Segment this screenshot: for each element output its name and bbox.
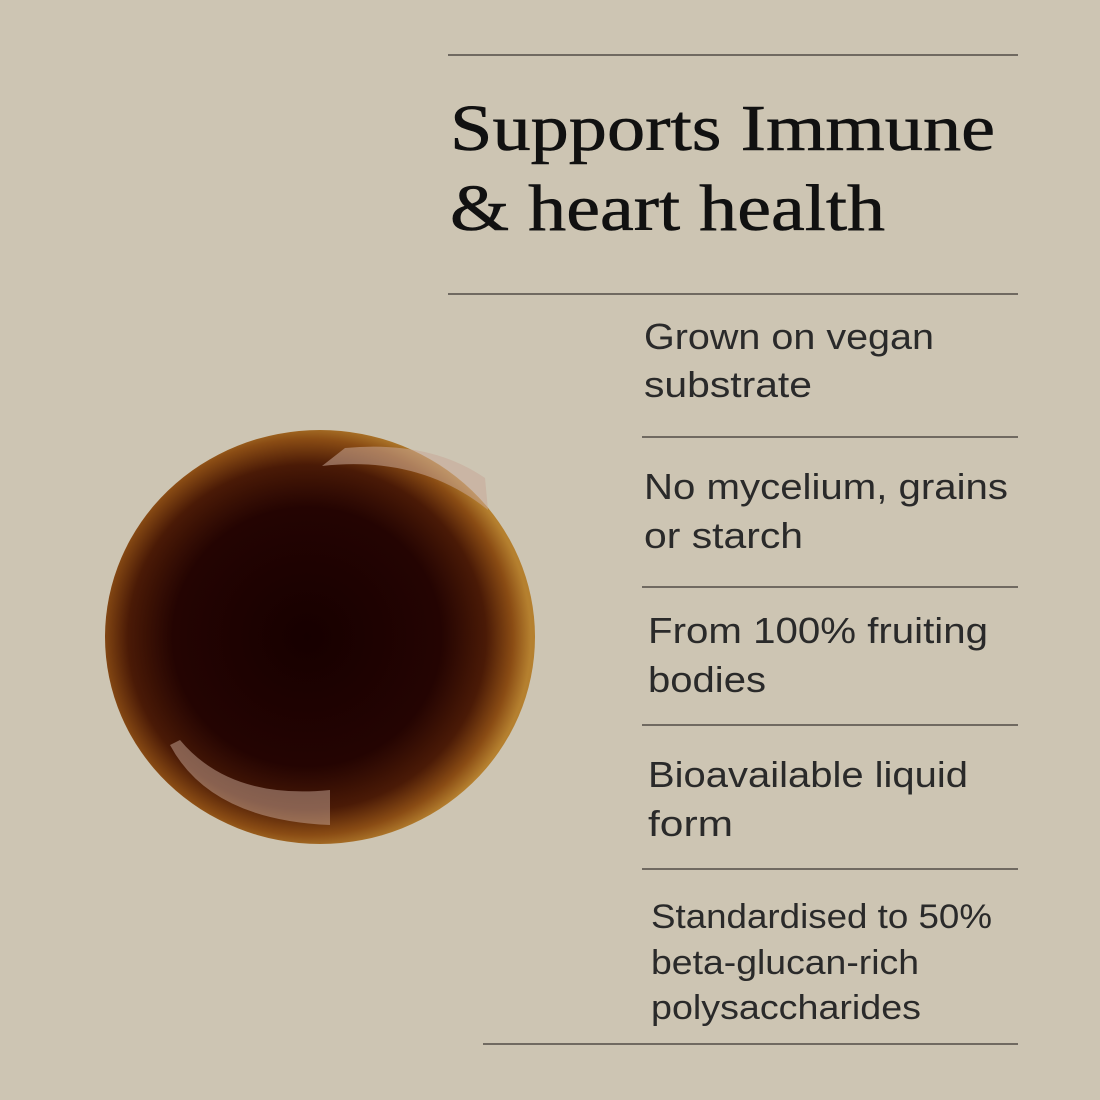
item: standardised — [651, 898, 992, 1027]
item: no mycelium: or starch — [644, 515, 803, 556]
title: & heart health — [450, 172, 885, 245]
item: liquid form: Bioavailable liquid — [648, 754, 968, 795]
item: fruiting bodies: bodies — [648, 659, 766, 700]
item: vegan substrate: substrate — [644, 364, 812, 405]
item: liquid form: form — [648, 803, 733, 844]
item: standardised: beta-glucan-rich — [651, 944, 919, 982]
item: fruiting bodies — [648, 610, 988, 700]
title — [450, 92, 995, 245]
title: Supports Immune — [450, 92, 995, 165]
feature list — [644, 316, 1008, 1027]
item: no mycelium — [644, 466, 1008, 556]
item: no mycelium: No mycelium, grains — [644, 466, 1008, 507]
item: vegan substrate: Grown on vegan — [644, 316, 934, 357]
item: vegan substrate — [644, 316, 934, 405]
item: standardised: Standardised to 50% — [651, 898, 992, 936]
item: fruiting bodies: From 100% fruiting — [648, 610, 988, 651]
item: liquid form — [648, 754, 968, 844]
item: standardised: polysaccharides — [651, 989, 921, 1027]
image: liquid drop — [105, 430, 535, 844]
